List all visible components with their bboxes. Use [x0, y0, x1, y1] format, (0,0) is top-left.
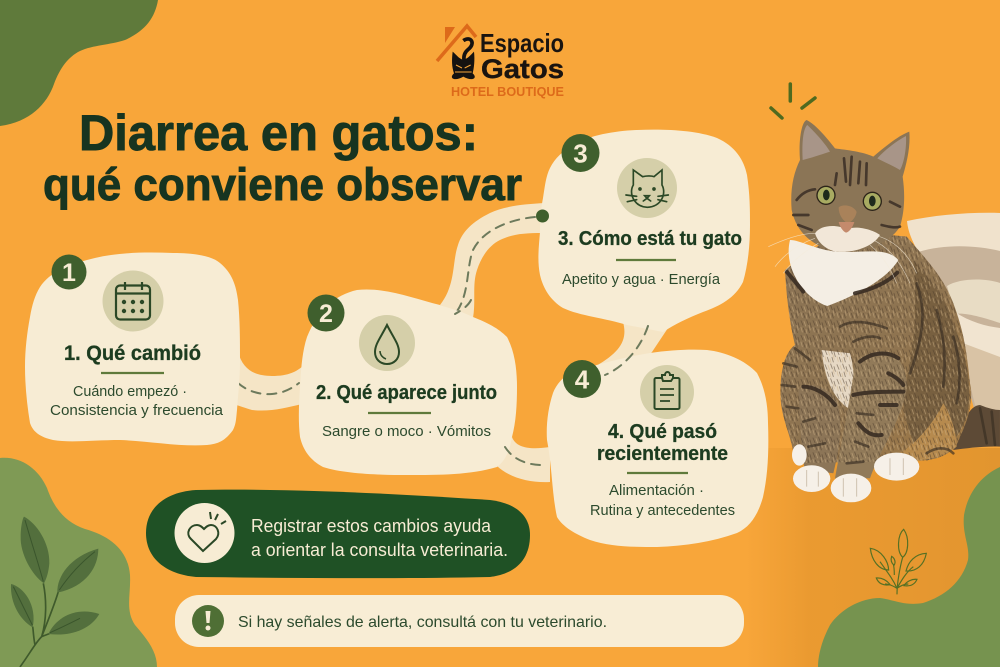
cat stripes [782, 272, 995, 463]
title: qué conviene observar [43, 159, 522, 210]
body 1: Cuándo empezó · [73, 383, 187, 400]
cat lower chest [822, 350, 854, 408]
badge 1 [52, 254, 86, 290]
forehead stripes [793, 157, 900, 230]
icon: clipboard [640, 365, 694, 419]
title: Diarrea en gatos: [79, 105, 478, 161]
badge 3: 3 [573, 138, 588, 168]
body 4: Rutina y antecedentes [590, 502, 735, 519]
cat body [780, 230, 971, 463]
heading 4: 4. Qué pasó [608, 421, 717, 443]
heading 4: recientemente [597, 443, 728, 465]
leaf sprig [11, 517, 99, 667]
panel: step 4 [547, 350, 768, 547]
body 3: Apetito y agua · Energía [562, 271, 721, 288]
logo: Gatos [481, 54, 564, 84]
callout text: a orientar la consulta veterinaria. [251, 540, 508, 560]
badge 2 [308, 294, 344, 332]
cat front legs [798, 385, 840, 473]
left eye [816, 186, 836, 205]
connector dashes over card edges [455, 300, 648, 465]
green blob: top left [0, 0, 158, 126]
green blob: bottom right [818, 467, 1000, 667]
panel: step 3 [536, 130, 750, 332]
callout: record changes [146, 490, 530, 578]
logo: HOTEL BOUTIQUE [451, 84, 564, 99]
cat paws [792, 444, 919, 502]
alert text: Si hay señales de alerta, consultá con tu veterinario. [238, 614, 607, 631]
cat flank shading [903, 260, 969, 461]
attention sparks above cat [771, 84, 815, 118]
cat fur texture [780, 235, 971, 463]
logo text: Espacio [480, 28, 564, 58]
muzzle [815, 226, 880, 252]
logo roof [437, 26, 476, 61]
badge 4 [563, 360, 601, 398]
heading 3: 3. Cómo está tu gato [558, 228, 742, 250]
icon: calendar [102, 270, 164, 332]
connector bands between cards [236, 203, 668, 482]
body 4: Alimentación · [609, 482, 704, 499]
badge 4: 4 [575, 364, 590, 394]
heading 2: 2. Qué aparece junto [316, 382, 497, 404]
heading 1: 1. Qué cambió [64, 342, 201, 365]
right eye [863, 192, 882, 211]
cat tail [953, 405, 1000, 450]
body 2: Sangre o moco · Vómitos [322, 423, 491, 440]
badge 3 [562, 134, 600, 172]
connector dot [536, 210, 549, 222]
panel: step 2 [299, 289, 517, 475]
icon: exclamation [192, 605, 224, 637]
green blob: bottom left with leaves [0, 458, 157, 667]
icon: cat face [617, 158, 677, 218]
icon: line-art plant [870, 529, 926, 594]
whiskers [768, 233, 917, 283]
logo cat [452, 39, 475, 79]
cat chest [789, 240, 898, 306]
panel: step 1 [25, 253, 240, 445]
cat head [791, 120, 910, 252]
body 1: Consistencia y frecuencia [50, 402, 224, 419]
litter box [907, 213, 1000, 418]
ears inner [802, 125, 830, 160]
callout text: Registrar estos cambios ayuda [251, 516, 492, 536]
nose [839, 222, 854, 233]
connector dashed paths [238, 217, 535, 394]
title [43, 105, 522, 210]
cat photo illustration [768, 120, 1000, 502]
icon: water drop [359, 315, 415, 371]
wooden floor [745, 448, 1000, 667]
logo [437, 26, 564, 99]
badge 2: 2 [319, 300, 333, 328]
icon: heart [174, 503, 234, 563]
alert bar [175, 595, 744, 647]
badge 1: 1 [62, 259, 76, 287]
